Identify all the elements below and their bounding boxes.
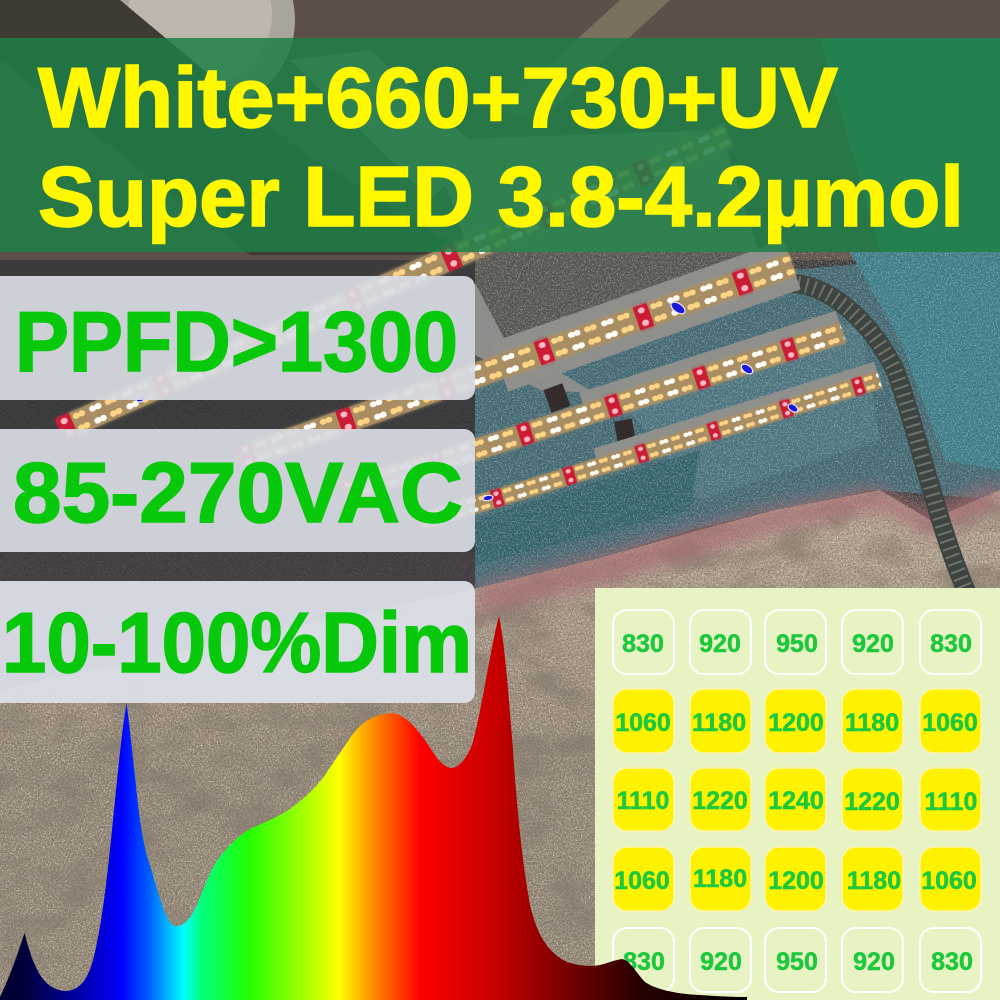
row 5: 920 <box>853 948 895 976</box>
row 2: 1060 <box>615 709 671 737</box>
light bar D <box>414 362 882 530</box>
row 2: 1060 <box>922 709 978 737</box>
row 3: 1110 <box>617 787 669 815</box>
row 2: 1180 <box>692 709 746 737</box>
row 5 <box>613 928 981 992</box>
light bar C <box>336 311 846 502</box>
row 1 <box>613 610 981 674</box>
UV diodes <box>135 300 799 501</box>
row 4: 1180 <box>847 867 901 895</box>
row 3: 1240 <box>768 787 824 815</box>
header banner <box>0 38 1000 252</box>
row 3: 1220 <box>844 788 900 816</box>
row 1: 830 <box>622 630 664 658</box>
light bar B <box>231 240 801 483</box>
row 3 <box>613 768 981 831</box>
rose band on foil <box>475 480 1000 615</box>
row 2: 1180 <box>845 709 899 737</box>
title line 1: White+660+730+UV <box>38 51 838 146</box>
title line 2: Super LED 3.8-4.2µmol <box>38 150 964 245</box>
LED light fixture <box>55 124 882 530</box>
row 3: 1110 <box>925 788 977 816</box>
row 4 <box>613 847 981 911</box>
row 4: 1060 <box>614 867 670 895</box>
panel: dimming: 10-100%Dim <box>2 596 472 691</box>
panel: voltage: 85-270VAC <box>13 446 463 541</box>
row 4: 1180 <box>693 865 747 893</box>
panel: PPFD grid <box>595 588 1000 1000</box>
row 5: 830 <box>623 948 665 976</box>
row 2: 1200 <box>768 709 824 737</box>
support plates <box>475 283 636 445</box>
row 5: 950 <box>776 948 818 976</box>
row 1: 830 <box>930 630 972 658</box>
dark wall upper centre <box>475 252 780 345</box>
silver foil <box>0 480 1000 1000</box>
row 1: 920 <box>699 630 741 658</box>
light bar A <box>55 124 733 441</box>
row 2 <box>613 689 981 753</box>
row 1: 950 <box>776 630 818 658</box>
row 5: 830 <box>931 948 973 976</box>
row 5: 920 <box>700 948 742 976</box>
spectrum chart <box>0 616 747 1000</box>
panel: PPFD: PPFD>1300 <box>15 295 458 390</box>
ceiling duct <box>0 0 1000 260</box>
row 3: 1220 <box>692 787 748 815</box>
teal reflective wall <box>475 252 1000 590</box>
row 4: 1200 <box>768 867 824 895</box>
row 1: 920 <box>852 630 894 658</box>
row 4: 1060 <box>921 867 977 895</box>
dark seam arch <box>790 283 968 595</box>
dark wall left of foil <box>0 400 475 582</box>
